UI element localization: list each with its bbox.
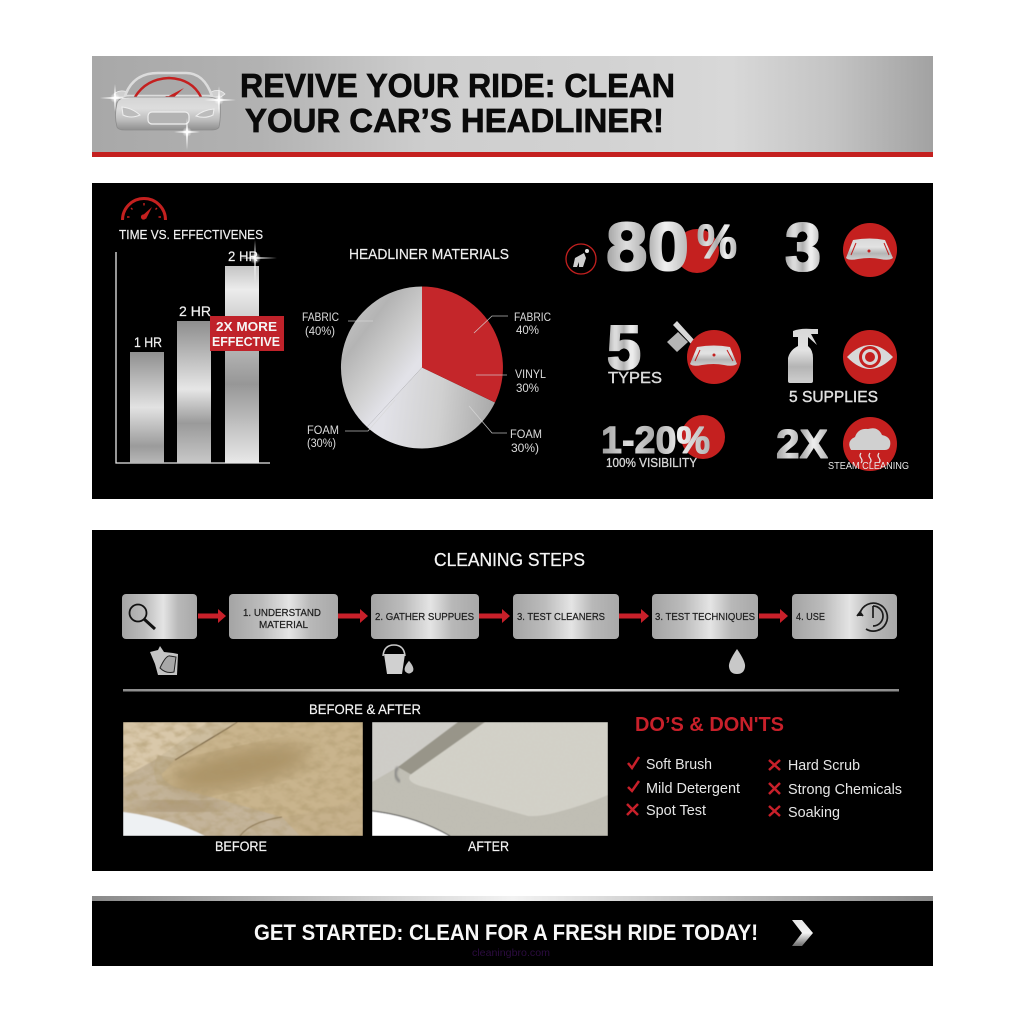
bar chart: time vs effectiveness: 1 HR — [134, 334, 162, 350]
pie chart: headliner materials: (30%) — [307, 438, 336, 450]
stat: 80%: 80 — [606, 209, 689, 285]
pie chart: headliner materials: FOAM — [510, 429, 542, 441]
list: don'ts: Soaking — [788, 805, 840, 821]
bar chart: time vs effectiveness: 2 HR — [228, 248, 258, 264]
step 4: 3. TEST TECHNIQUES — [655, 611, 755, 623]
label: after: AFTER — [468, 838, 509, 854]
arrows between steps — [198, 609, 788, 623]
title: YOUR CAR’S HEADLINER! — [245, 103, 664, 140]
list: do's — [627, 757, 740, 819]
pie chart: headliner materials: 40% — [516, 325, 539, 337]
call to action text: GET STARTED: CLEAN FOR A FRESH RIDE TODAY! — [254, 920, 758, 945]
photo: after — [372, 722, 608, 836]
heading: cleaning steps: CLEANING STEPS — [434, 550, 585, 570]
list: don'ts: Strong Chemicals — [788, 782, 902, 798]
title — [240, 68, 675, 140]
list: do's: Mild Detergent — [646, 781, 740, 797]
step 3: 3. TEST CLEANERS — [517, 611, 605, 623]
pie heading: HEADLINER MATERIALS — [349, 246, 509, 263]
stat: 1-20%: 1-20% — [601, 420, 710, 462]
icon: steam cloud — [849, 428, 890, 463]
bar chart: time vs effectiveness: EFFECTIVE — [212, 334, 280, 349]
step 1: 1. UNDERSTAND — [243, 607, 321, 619]
icon: spray bottle — [788, 329, 818, 383]
stat: 5 supplies — [788, 329, 897, 406]
divider — [123, 689, 899, 692]
bar chart: time vs effectiveness: 2 HR — [179, 303, 211, 319]
panel: statistics — [92, 183, 933, 499]
step 1: MATERIAL — [259, 619, 308, 631]
chart heading: TIME VS. EFFECTIVENES — [119, 227, 263, 242]
pie chart: headliner materials: VINYL — [515, 369, 547, 381]
step: magnifier — [122, 594, 197, 639]
stat: 80% — [566, 209, 737, 285]
list: do's: Spot Test — [646, 803, 706, 819]
icon: gauge — [122, 198, 166, 220]
stat: 5 types: TYPES — [608, 370, 662, 387]
step 2: 2. GATHER SUPPUES — [375, 611, 474, 623]
pie chart: headliner materials: FOAM — [307, 425, 339, 437]
icon: chrome car with gauge — [114, 73, 225, 130]
step 4 — [652, 594, 758, 639]
pie chart: headliner materials — [302, 246, 551, 455]
step 1 — [229, 594, 338, 639]
icon: water drop — [729, 649, 745, 674]
stat: 1-20% — [601, 415, 725, 470]
bar chart: time vs effectiveness: 2X MORE — [216, 319, 277, 334]
label: before: BEFORE — [215, 838, 267, 854]
icon: bucket with sponge — [150, 646, 178, 675]
pie chart: headliner materials: (40%) — [305, 326, 335, 338]
stat: 3 — [785, 209, 897, 285]
icon: spray nozzle — [667, 321, 696, 352]
pie chart: headliner materials: FABRIC — [514, 312, 551, 324]
stat: 5 types — [607, 314, 741, 387]
call to action footer — [92, 896, 933, 966]
step 5: 4. USE — [796, 611, 825, 623]
icon: headliner — [690, 346, 737, 366]
stat: 5 types: 5 — [607, 314, 641, 383]
step 3 — [513, 594, 619, 639]
list: don'ts: Hard Scrub — [788, 758, 860, 774]
pie chart: headliner materials: 30%) — [511, 443, 539, 455]
pie chart: headliner materials: FABRIC — [302, 312, 339, 324]
step 2 — [371, 594, 479, 639]
icon: bucket with drop — [383, 645, 414, 674]
header banner — [92, 56, 933, 157]
heading: before and after: BEFORE & AFTER — [309, 701, 421, 717]
panel: cleaning steps — [92, 530, 933, 871]
stat: 80%: % — [697, 216, 737, 269]
icon: eye — [847, 345, 893, 369]
source credit: cleaningbro.com — [472, 947, 550, 959]
stat: 1-20%: 100% VISIBILITY — [606, 456, 698, 470]
stat: 2X steam cleaning — [776, 417, 909, 472]
stat: 3: 3 — [785, 209, 821, 285]
icon: timer — [857, 603, 887, 631]
list: don'ts — [769, 758, 902, 821]
bar chart: time vs effectiveness — [116, 227, 284, 463]
photo: before — [123, 722, 363, 836]
title: REVIVE YOUR RIDE: CLEAN — [240, 68, 675, 105]
pie chart: headliner materials: 30% — [516, 383, 539, 395]
stat: 5 supplies: 5 SUPPLIES — [789, 389, 878, 406]
list: do's: Soft Brush — [646, 757, 712, 773]
icon: headliner — [846, 238, 893, 260]
stat: 2X steam cleaning: STEAM CLEANING — [828, 460, 909, 472]
icon: car sparkles — [100, 84, 236, 150]
heading: do's and don'ts: DO’S & DON'TS — [635, 714, 784, 736]
icon: chevron — [792, 920, 813, 946]
step 5 — [792, 594, 897, 639]
stat: 2X steam cleaning: 2X — [776, 421, 828, 467]
